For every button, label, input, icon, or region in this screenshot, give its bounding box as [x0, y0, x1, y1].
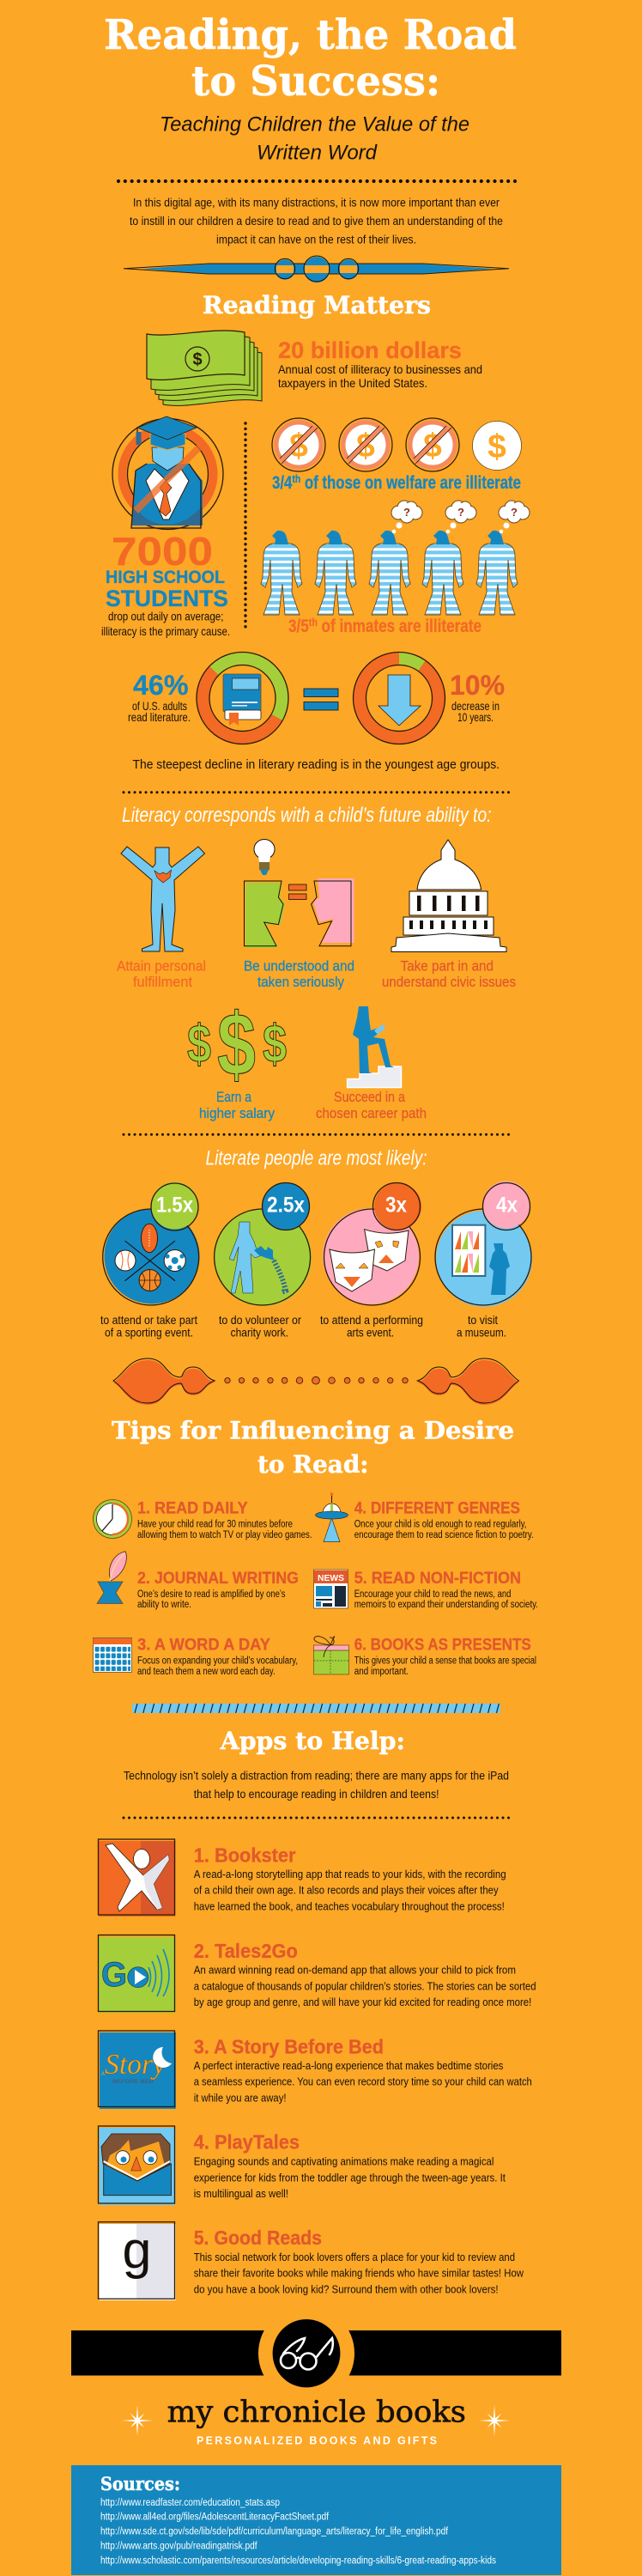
tip 3: Focus on expanding your child’s vocabulary, — [137, 1656, 298, 1667]
intro text: impact it can have on the rest of their lives. — [216, 233, 416, 246]
tip 1 — [137, 1500, 312, 1540]
donut chart: 10 percent decrease — [354, 653, 445, 744]
icon: light bulb and two heads — [244, 840, 354, 948]
icon: person with heart — [121, 847, 204, 951]
sources list: http://www.sde.ct.gov/sde/lib/sde/pdf/curriculum/language_arts/literacy_for_life_english.pdf — [100, 2527, 449, 2537]
icon: money stack: $ — [192, 350, 203, 369]
labels: row two abilities: higher salary — [199, 1105, 275, 1121]
app 5 text: This social network for book lovers offers a place for your kid to review and — [194, 2251, 515, 2263]
circle: sporting event 1.5x: 1.5x — [156, 1194, 193, 1218]
labels: row one abilities: fulfillment — [133, 974, 192, 990]
tip 5: Encourage your child to read the news, and — [354, 1589, 511, 1600]
heading: tips: Tips for Influencing a Desire — [112, 1417, 514, 1445]
tip 2: 2. JOURNAL WRITING — [137, 1570, 299, 1588]
tip 5: 5. READ NON-FICTION — [354, 1570, 521, 1588]
icon: capitol building — [391, 840, 506, 951]
labels: row two abilities: Succeed in a — [334, 1089, 405, 1105]
heading: tips — [112, 1417, 514, 1479]
intro text: In this digital age, with its many distractions, it is now more important than ever — [133, 197, 500, 210]
donut chart: 46 percent with book — [197, 653, 288, 744]
tip 1: Have your child read for 30 minutes before — [137, 1520, 293, 1530]
tip 4 — [354, 1500, 534, 1540]
sources list: http://www.readfaster.com/education_stats.asp — [100, 2498, 280, 2508]
app 5 text — [194, 2227, 524, 2295]
stat: welfare: th — [292, 472, 300, 485]
apps intro text: Technology isn’t solely a distraction from reading; there are many apps for the iPad — [124, 1769, 509, 1782]
subtitle — [160, 113, 469, 165]
stat: inmates: th — [309, 616, 318, 629]
intro text — [130, 197, 503, 246]
app 3 text: 3. A Story Before Bed — [194, 2036, 384, 2058]
stat: 7000 high school students: STUDENTS — [106, 586, 228, 611]
icon: quill and ink — [97, 1552, 126, 1604]
app 5 text: 5. Good Reads — [194, 2227, 322, 2249]
ornament divider — [124, 256, 509, 283]
icon: gift — [314, 1637, 348, 1674]
circle: museum 4x — [435, 1182, 532, 1307]
icon: bookster app — [98, 1839, 175, 1917]
icon: clock — [93, 1499, 132, 1539]
icon: ufo — [316, 1492, 348, 1542]
circle: sporting event 1.5x — [103, 1182, 199, 1305]
captions: most likely to — [100, 1313, 506, 1340]
tip 6 — [354, 1637, 536, 1677]
app 1 text: A read-a-long storytelling app that reads to your kids, with the recording — [194, 1868, 506, 1880]
icon: a story before bed app: A — [101, 2072, 105, 2077]
tip 6: 6. BOOKS AS PRESENTS — [354, 1637, 531, 1655]
circle: museum 4x: 4x — [496, 1194, 518, 1218]
circle: performing arts 3x: 3x — [385, 1194, 407, 1218]
tip 4: Once your child is old enough to read regularly, — [354, 1520, 527, 1530]
stat: welfare: of those on welfare are illiterate — [300, 473, 521, 493]
icons: welfare coins — [272, 418, 522, 471]
captions: most likely to: a museum. — [457, 1326, 506, 1340]
icons: welfare coins: $ — [488, 428, 506, 465]
sources list — [100, 2498, 496, 2566]
app 1 text — [194, 1844, 506, 1912]
icon: newspaper: NEWS — [318, 1574, 344, 1583]
stat: 20 billion dollars — [278, 337, 482, 390]
stat: 10% — [450, 670, 505, 724]
tip 3: 3. A WORD A DAY — [137, 1637, 270, 1655]
stat: 46%: of U.S. adults — [132, 699, 187, 713]
captions: most likely to: to attend a performing — [320, 1313, 423, 1327]
captions: most likely to: charity work. — [231, 1326, 288, 1340]
note: steepest decline: The steepest decline in literary reading is in the youngest age groups. — [132, 757, 500, 772]
circle: volunteer 2.5x — [215, 1183, 312, 1306]
app 1 text: have learned the book, and teaches vocabulary throughout the process! — [194, 1900, 505, 1912]
heading: literate people: Literate people are most likely: — [206, 1147, 427, 1170]
captions: most likely to: of a sporting event. — [105, 1326, 193, 1340]
app 1 text: of a child their own age. It also records and plays their voices after they — [194, 1885, 499, 1897]
icon: graduate with prohibition sign — [112, 416, 223, 529]
stat: 20 billion dollars: taxpayers in the United States. — [278, 376, 427, 390]
captions: most likely to: to do volunteer or — [219, 1313, 301, 1327]
app 3 text: a seamless experience. You can even record story time so your child can watch — [194, 2076, 532, 2088]
stat: 46% — [128, 670, 191, 724]
stat: 7000 high school students: 7000 — [112, 529, 213, 574]
circle: performing arts 3x — [323, 1183, 421, 1305]
apps intro text — [124, 1769, 509, 1801]
tip 3 — [137, 1637, 298, 1677]
app 2 text: An award winning read on-demand app that allows your child to pick from — [194, 1965, 516, 1977]
captions: most likely to: arts event. — [347, 1326, 394, 1340]
labels: row one abilities — [117, 958, 516, 990]
sources heading: Sources: — [100, 2473, 180, 2494]
title: to Success: — [191, 58, 440, 106]
labels: row one abilities: taken seriously — [257, 974, 344, 990]
labels: row two abilities: chosen career path — [316, 1105, 427, 1121]
title — [104, 11, 517, 106]
labels: row one abilities: understand civic issues — [382, 974, 516, 990]
stat: 10%: 10% — [450, 670, 505, 701]
app 3 text: it while you are away! — [194, 2092, 287, 2104]
icon: newspaper — [314, 1570, 348, 1608]
labels: row two abilities — [199, 1089, 427, 1121]
equals sign — [304, 689, 338, 710]
tip 4: encourage them to read science fiction to poetry. — [354, 1530, 534, 1540]
icon: goodreads app — [98, 2221, 175, 2300]
brand: my chronicle books — [122, 2396, 510, 2447]
app 4 text: is multilingual as well! — [194, 2188, 288, 2200]
app 4 text — [194, 2131, 506, 2200]
app 2 text: a catalogue of thousands of popular children’s stories. The stories can be sorted — [194, 1980, 536, 1992]
stat: 7000 high school students: HIGH SCHOOL — [106, 568, 225, 587]
icon: dollar signs: $ — [217, 995, 256, 1094]
stat: 7000 high school students: drop out daily on average; — [108, 610, 223, 623]
app 2 text — [194, 1940, 536, 2008]
captions: most likely to: to attend or take part — [100, 1313, 197, 1327]
stat: 46%: 46% — [133, 670, 189, 701]
app 3 text — [194, 2036, 532, 2104]
stat: 7000 high school students: illiteracy is the primary cause. — [101, 624, 230, 638]
labels: row one abilities: Take part in and — [401, 958, 494, 975]
app 2 text: 2. Tales2Go — [194, 1940, 298, 1962]
icon: a story before bed app: Story — [105, 2049, 167, 2081]
stat: welfare: 3/4 — [272, 473, 297, 493]
subtitle: Teaching Children the Value of the — [160, 113, 469, 137]
sources list: http://www.arts.gov/pub/readingatrisk.pdf — [100, 2542, 257, 2552]
app 4 text: experience for kids from the toddler age through the tween-age years. It — [194, 2172, 506, 2184]
tip 6: This gives your child a sense that books are special — [354, 1656, 536, 1667]
stat: 7000 high school students — [101, 529, 230, 638]
labels: row one abilities: Attain personal — [117, 958, 206, 975]
intro text: to instill in our children a desire to read and to give them an understanding of the — [130, 215, 503, 228]
stat: 10%: decrease in — [451, 699, 500, 713]
icon: calendar — [93, 1638, 132, 1673]
icon: playtales app — [98, 2126, 175, 2205]
icons: inmates with thought clouds — [261, 501, 530, 615]
tip 5 — [354, 1570, 538, 1610]
icon: a story before bed app — [98, 2031, 176, 2109]
subtitle: Written Word — [257, 142, 378, 165]
brand: my chronicle books: my chronicle books — [167, 2396, 466, 2430]
logo band with glasses — [71, 2306, 561, 2402]
icon: money stack — [147, 331, 262, 405]
icon: goodreads app: g — [123, 2221, 151, 2280]
heading: literacy corresponds: Literacy corresponds with a child’s future ability to: — [122, 804, 491, 827]
sources list: http://www.scholastic.com/parents/resources/article/developing-reading-skills/6-great-reading-apps-kids — [100, 2555, 496, 2566]
stat: 20 billion dollars: 20 billion dollars — [278, 337, 462, 363]
tip 2 — [137, 1570, 299, 1610]
stat: 46%: read literature. — [128, 710, 191, 724]
ornament: orange blobs and dots — [113, 1358, 518, 1405]
app 3 text: A perfect interactive read-a-long experience that makes bedtime stories — [194, 2060, 503, 2072]
icon: a story before bed app: BEFORE BED — [112, 2080, 154, 2085]
title: Reading, the Road — [104, 11, 517, 59]
icon: dollar signs: $ — [187, 1015, 211, 1074]
tip 6: and important. — [354, 1667, 409, 1677]
heading: tips: to Read: — [257, 1450, 369, 1479]
app 4 text: Engaging sounds and captivating animations make reading a magical — [194, 2156, 494, 2168]
heading: reading matters: Reading Matters — [203, 291, 431, 319]
tip 4: 4. DIFFERENT GENRES — [354, 1500, 520, 1518]
icon: climber on stairs — [348, 1006, 402, 1087]
stat: 20 billion dollars: Annual cost of illiteracy to businesses and — [278, 362, 482, 376]
captions: most likely to: to visit — [468, 1313, 498, 1327]
icon: tales2go app: G — [101, 1956, 127, 1994]
stat: inmates: of inmates are illiterate — [318, 617, 482, 636]
stat: inmates: 3/5 — [288, 617, 313, 636]
tip 2: One’s desire to read is amplified by one’s — [137, 1589, 286, 1600]
tip 5: memoirs to expand their understanding of society. — [354, 1600, 538, 1610]
sources list: http://www.all4ed.org/files/AdolescentLiteracyFactSheet.pdf — [100, 2512, 330, 2523]
labels: row two abilities: Earn a — [216, 1089, 251, 1105]
app 2 text: by age group and genre, and will have your kid excited for reading once more! — [194, 1996, 531, 2008]
app 5 text: do you have a book loving kid? Surround them with other book lovers! — [194, 2283, 499, 2295]
tip 2: ability to write. — [137, 1600, 191, 1610]
panel: sources — [71, 2465, 561, 2575]
stat: 10%: 10 years. — [457, 710, 494, 724]
icon: tales2go app — [98, 1935, 175, 2013]
tip 1: 1. READ DAILY — [137, 1500, 248, 1518]
circle: volunteer 2.5x: 2.5x — [267, 1194, 305, 1218]
brand: my chronicle books: PERSONALIZED BOOKS AND GIFTS — [197, 2435, 437, 2447]
app 5 text: share their favorite books while making friends who have similar tastes! How — [194, 2268, 524, 2280]
labels: row one abilities: Be understood and — [244, 958, 354, 975]
heading: apps to help: Apps to Help: — [220, 1727, 405, 1755]
app 1 text: 1. Bookster — [194, 1844, 296, 1866]
icon: dollar signs — [187, 995, 287, 1094]
apps intro text: that help to encourage reading in children and teens! — [194, 1788, 439, 1801]
tip 1: allowing them to watch TV or play video games. — [137, 1530, 312, 1540]
app 4 text: 4. PlayTales — [194, 2131, 300, 2154]
icon: dollar signs: $ — [263, 1015, 287, 1074]
tip 3: and teach them a new word each day. — [137, 1667, 276, 1677]
